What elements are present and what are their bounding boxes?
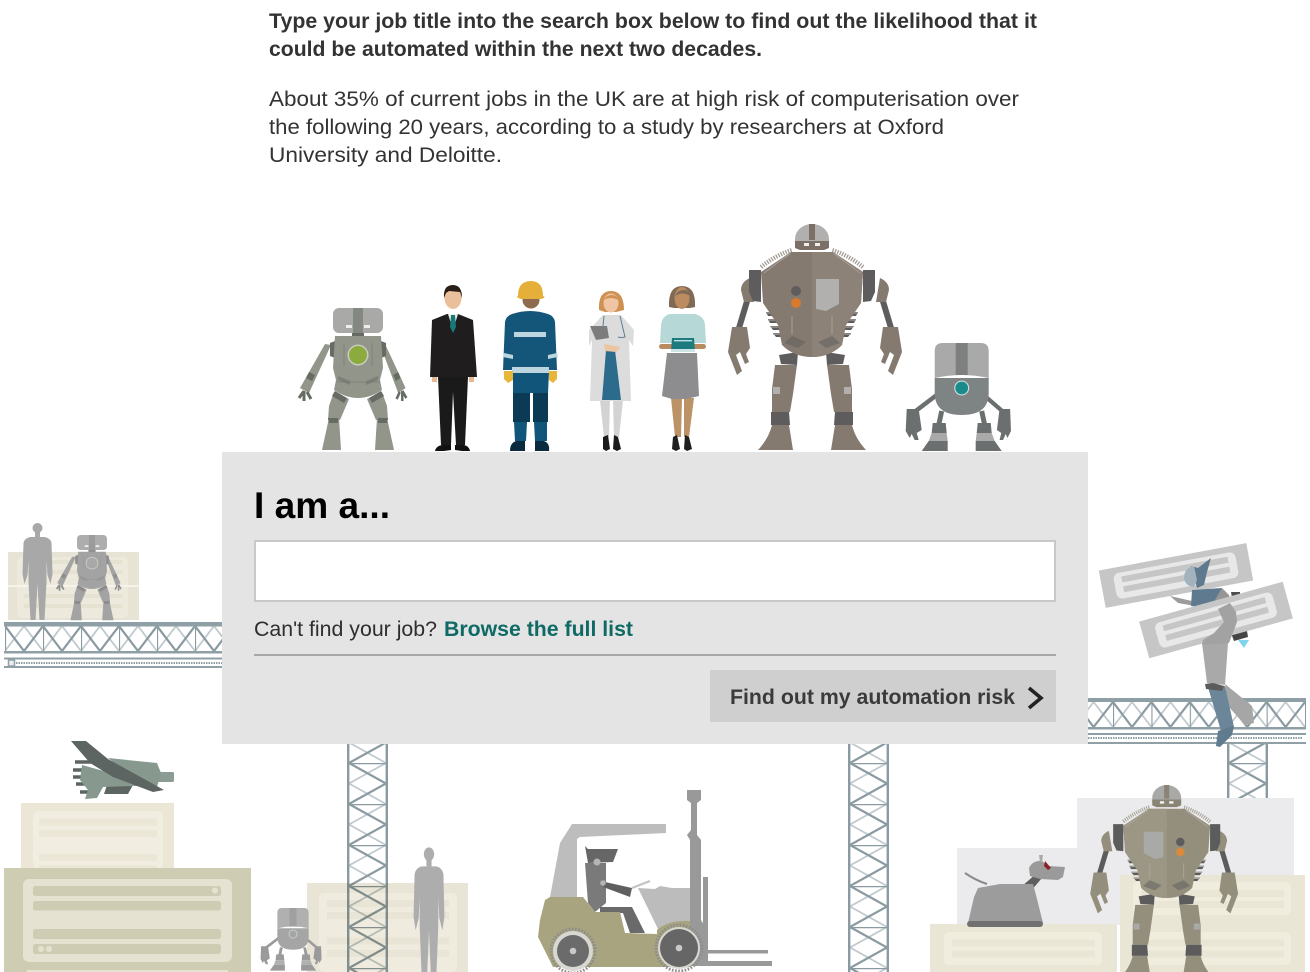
silhouette: person [22, 523, 52, 620]
scene: left scaffold with figures [4, 523, 222, 668]
help text: Can't find your job? [254, 618, 437, 641]
tower: right support [848, 744, 889, 972]
crate: upper cream [21, 803, 174, 869]
robot: green eye [299, 308, 406, 450]
person: woman with books [659, 286, 706, 451]
robot dog [965, 855, 1065, 927]
forklift [538, 790, 772, 972]
heading: I am a... [254, 485, 390, 526]
robot: small faded [261, 908, 322, 971]
crate: centre-left behind tower [307, 883, 468, 972]
forklift engine [638, 886, 690, 929]
search input [255, 541, 1055, 601]
body line three: University and Deloitte. [269, 144, 502, 167]
intro text [269, 10, 1037, 167]
button [710, 670, 1056, 722]
spaceship [71, 741, 174, 799]
silhouette: person bottom [414, 847, 444, 972]
person: businessman [430, 285, 477, 451]
forklift mast and forks [687, 790, 772, 966]
panel: search form [222, 452, 1088, 744]
person: construction worker [503, 281, 558, 451]
forklift body [538, 897, 690, 967]
robot: tan large [1090, 785, 1238, 972]
crate: carried upper [1099, 543, 1253, 608]
divider [254, 654, 1056, 656]
person: doctor [589, 291, 634, 451]
line-up on panel [299, 224, 1011, 451]
bold intro line one: Type your job title into the search box below to find out the likelihood that it [269, 10, 1037, 33]
crate: under tan robot [1120, 875, 1305, 972]
robot: large brown [728, 224, 902, 450]
flying robot arm [1202, 603, 1237, 645]
button label: Find out my automation risk [730, 686, 1015, 709]
robot: faded grey [57, 535, 121, 620]
flying robot body [1170, 558, 1254, 747]
tower: left support [347, 744, 388, 972]
crate: faded left [8, 552, 139, 620]
scene: bottom-left crates and spaceship [4, 741, 251, 972]
scene: bottom-right platforms [930, 743, 1305, 972]
robot: teal eye [906, 343, 1011, 451]
scene: right flying robot and truss [1088, 543, 1306, 747]
crate: carried lower [1139, 582, 1293, 658]
bold intro line two: could be automated within the next two decades. [269, 38, 762, 61]
browse link: Browse the full list [444, 618, 633, 641]
forklift driver [585, 846, 650, 933]
body line one: About 35% of current jobs in the UK are at high risk of computerisation over [269, 88, 1019, 111]
forklift canopy and engine [550, 824, 666, 897]
forklift rear wheel [551, 929, 595, 972]
truss: left platform [4, 622, 222, 668]
crate: under robot dog [930, 924, 1117, 972]
icon: chevron [1029, 688, 1041, 708]
truss: right platform [1088, 698, 1306, 744]
body line two: the following 20 years, according to a study by researchers at Oxford [269, 116, 944, 139]
backdrop: pale grey blocks [957, 798, 1294, 925]
forklift front wheel [656, 925, 702, 971]
tower: short right [1227, 743, 1268, 798]
crate: lower olive [4, 868, 251, 972]
